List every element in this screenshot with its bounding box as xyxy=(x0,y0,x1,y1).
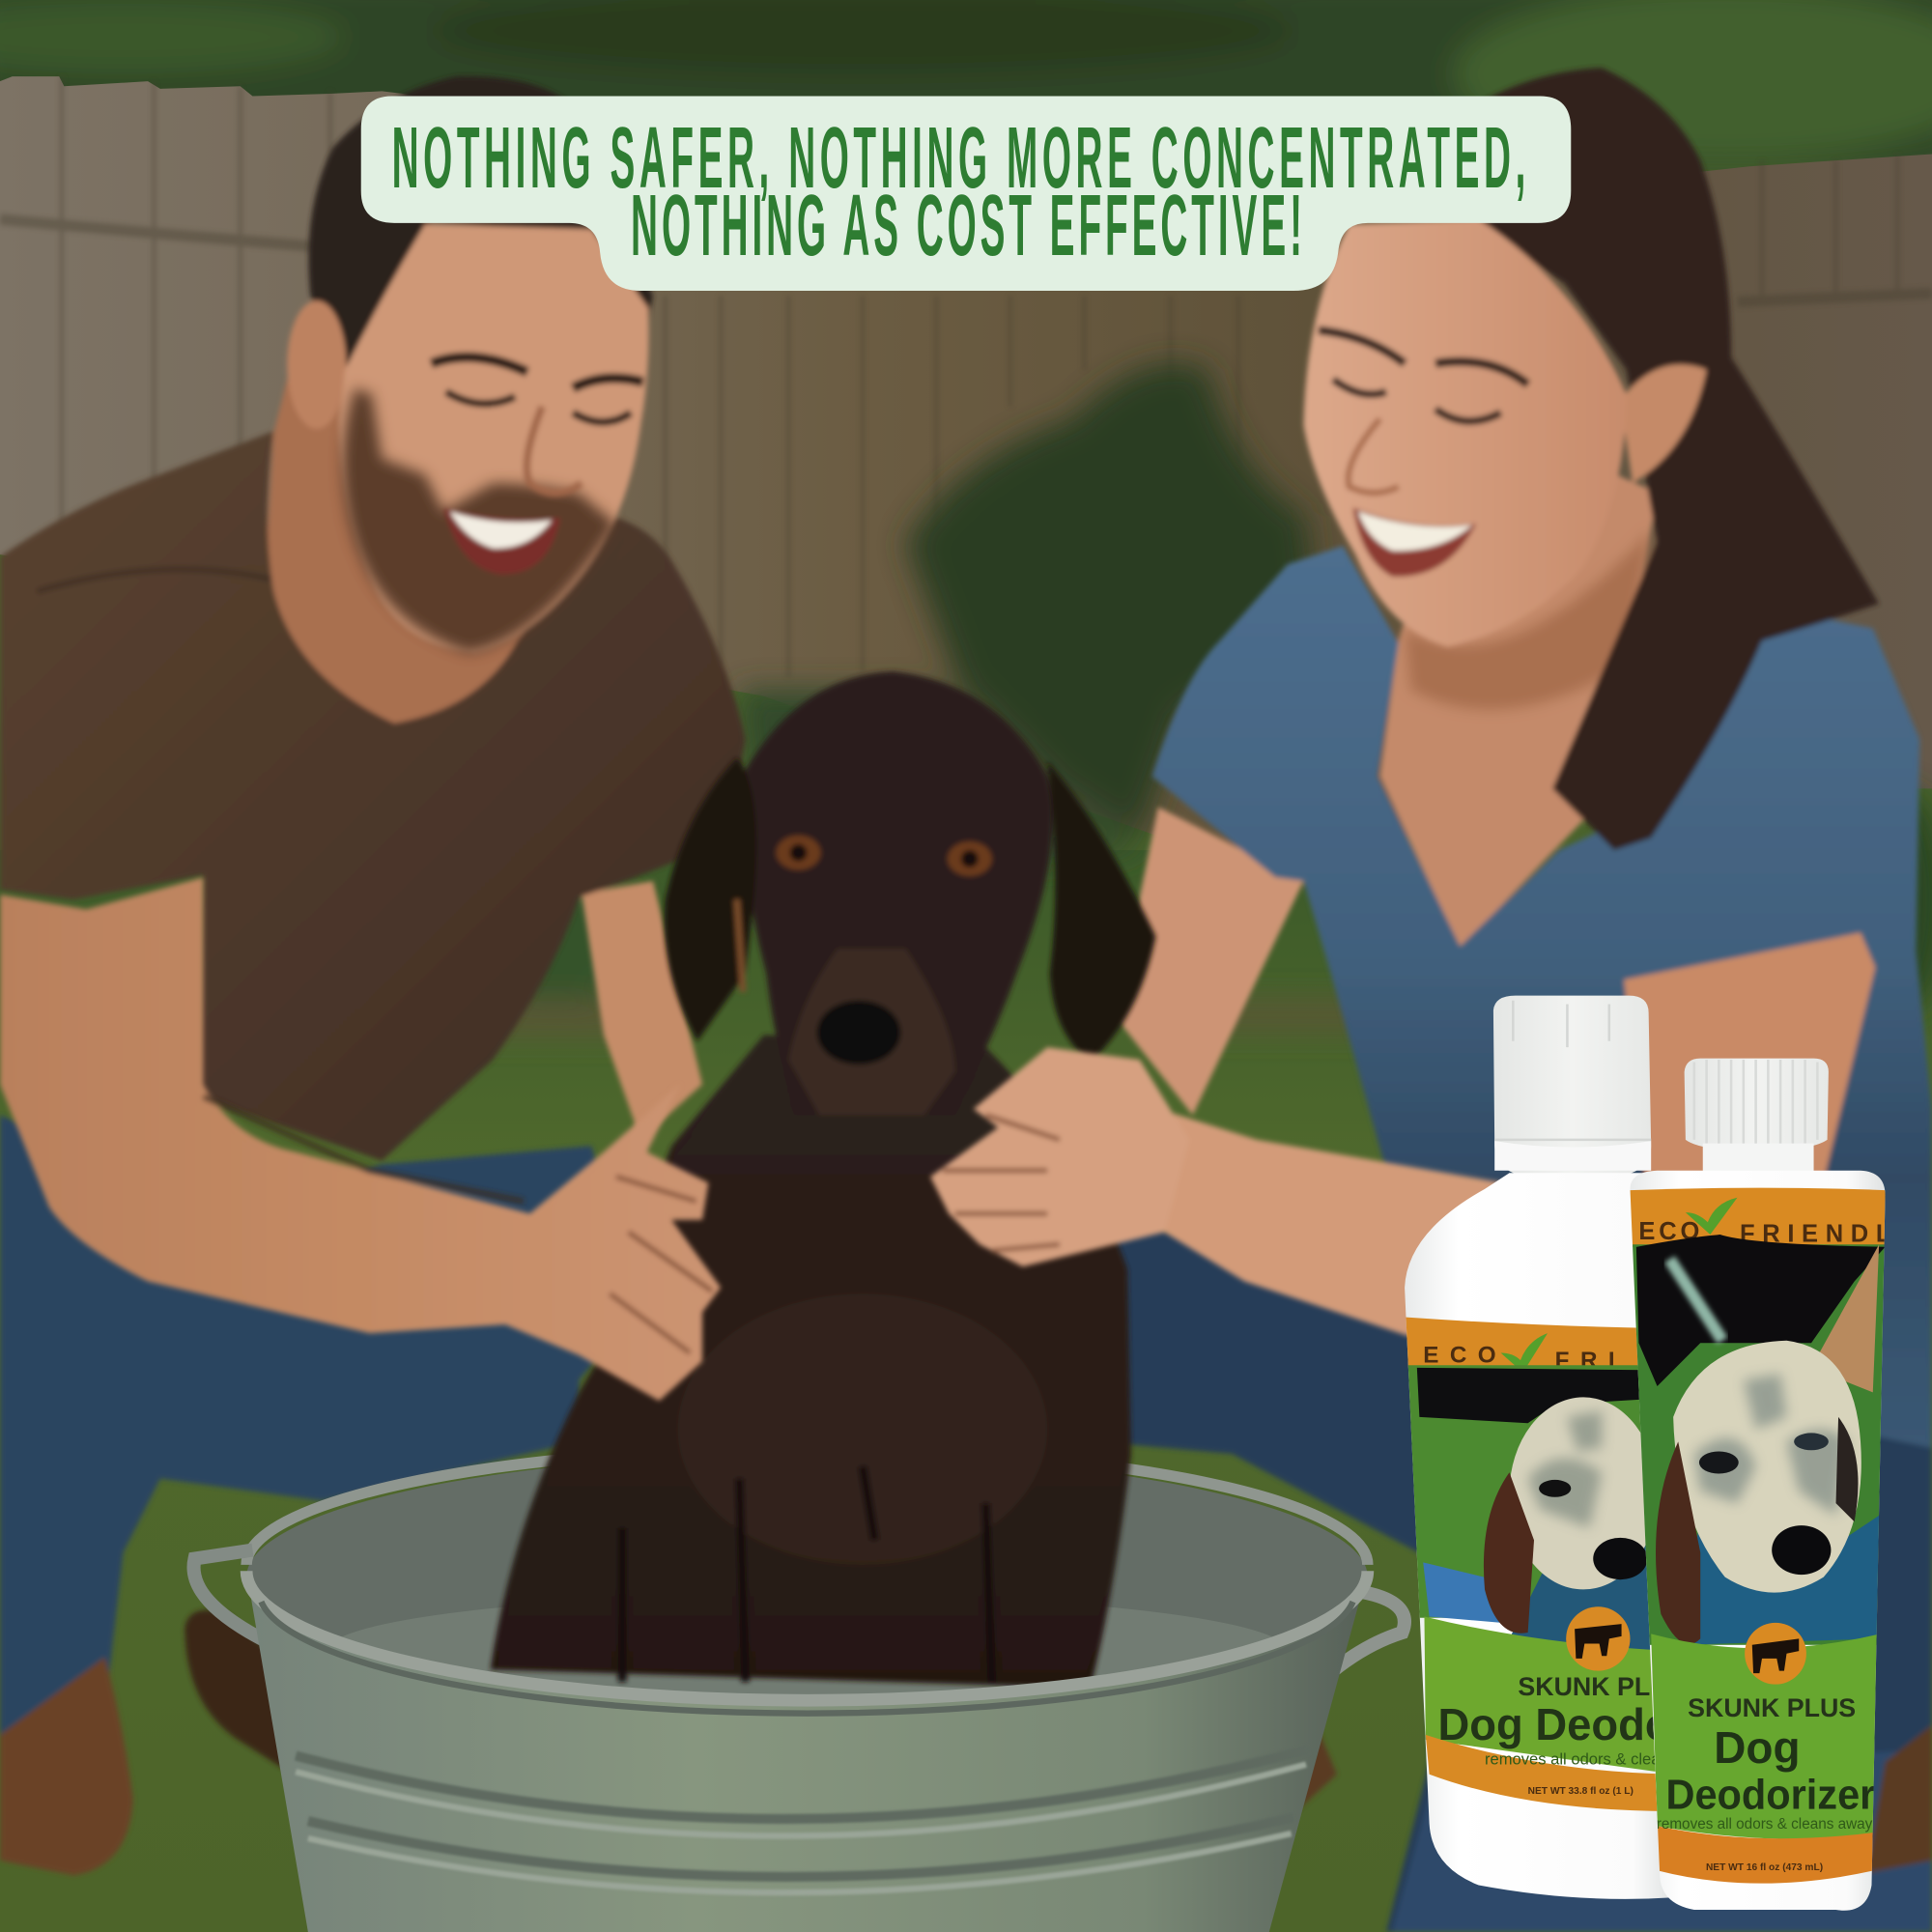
woman: jeans xyxy=(1096,1213,1932,1932)
woman: forearm and hand on dog xyxy=(930,1047,1503,1337)
man: smile xyxy=(443,508,560,574)
label: dog right ear xyxy=(1836,1417,1859,1521)
woman hand: shape xyxy=(930,1047,1189,1266)
label: badge xyxy=(1745,1623,1806,1685)
man: nose xyxy=(526,407,582,493)
label: badge dog xyxy=(1575,1624,1622,1659)
label: eco friendly text: ECO xyxy=(1423,1343,1507,1369)
label: tagline: removes all odors & cleans away xyxy=(1657,1816,1873,1833)
dog: leg shadows xyxy=(622,1466,992,1682)
dog: nose xyxy=(817,1001,900,1065)
label: product name: SKUNK PLUS xyxy=(1688,1693,1856,1722)
woman forearm: shape xyxy=(1140,1103,1503,1337)
label: dog eye xyxy=(1539,1480,1571,1497)
bottle large: body xyxy=(1405,1173,1673,1899)
label: photo dark xyxy=(1636,1235,1886,1386)
label: orange header xyxy=(1406,1318,1638,1368)
label: orange footer xyxy=(1658,1826,1886,1884)
product bottle: large xyxy=(1405,995,1669,1899)
woman: ear xyxy=(1620,364,1707,483)
dog: left ear xyxy=(665,757,756,1041)
banner: headline line 2: NOTHING AS COST EFFECTIVE! xyxy=(631,176,1302,274)
label: dog face shading xyxy=(1694,1374,1848,1516)
metal tub: inside xyxy=(246,1448,1368,1708)
label: product name: SKUNK PLUS xyxy=(1518,1672,1686,1701)
bottle large: cap band xyxy=(1494,1141,1651,1171)
label: leaf mark xyxy=(1686,1198,1737,1235)
dog: body xyxy=(491,1035,1131,1688)
woman: neck shadow xyxy=(1405,529,1651,710)
bottle small: cap xyxy=(1685,1059,1829,1151)
banner: headline line 1: NOTHING SAFER, NOTHING MORE CONCENTRATED, xyxy=(392,108,1525,206)
man: far boot xyxy=(185,1610,301,1780)
dog: chest highlights xyxy=(678,1293,1047,1565)
man: t-shirt xyxy=(0,431,746,1161)
man: arm and hand on dog xyxy=(0,877,721,1401)
product bottle: small xyxy=(1631,1059,1919,1911)
woman: teeth xyxy=(1358,511,1472,551)
man arm: hair edge xyxy=(203,1096,524,1202)
label: badge dog xyxy=(1752,1638,1799,1673)
label: dog eyes xyxy=(1699,1433,1829,1474)
man: face xyxy=(339,224,648,653)
label: product title: Dog Deodorizer xyxy=(1438,1699,1765,1749)
man: neck xyxy=(265,370,549,727)
metal tub: exterior xyxy=(194,1550,1405,1932)
man: jeans xyxy=(0,1115,640,1737)
label: photo grass xyxy=(1633,1244,1886,1645)
woman: ponytail and hair xyxy=(1466,68,1879,850)
label: dog nose xyxy=(1772,1525,1831,1575)
man: beard xyxy=(343,388,616,653)
label: net weight: NET WT 33.8 fl oz (1 L) xyxy=(1528,1786,1634,1797)
headline banner xyxy=(361,96,1571,291)
bottle small: label xyxy=(1631,1188,1919,1884)
woman: t-shirt xyxy=(1152,546,1932,1448)
bottle large: label xyxy=(1406,1318,1658,1811)
tub: ribs xyxy=(296,1749,1309,1877)
label: net weight: NET WT 16 fl oz (473 mL) xyxy=(1706,1862,1823,1873)
woman: nose xyxy=(1349,419,1399,493)
label: dog ear xyxy=(1484,1472,1534,1634)
tub: rim shadow xyxy=(261,1602,1353,1714)
label: product title line 2: Deodorizer xyxy=(1665,1772,1875,1818)
tub: body xyxy=(246,1571,1368,1932)
woman: smile xyxy=(1353,508,1476,577)
label: dog collar xyxy=(1682,1516,1879,1645)
man: eyes and brows xyxy=(431,357,643,388)
dog: muzzle xyxy=(788,949,955,1115)
woman: eyes and brows xyxy=(1319,330,1528,384)
man: ear xyxy=(287,300,346,429)
label: tagline: removes all odors & cleans xyxy=(1485,1750,1677,1769)
man: eyes xyxy=(446,392,631,422)
label: friendly text: FRI xyxy=(1555,1348,1626,1374)
label: photo grass xyxy=(1408,1365,1640,1618)
tub: left handle xyxy=(194,1550,273,1645)
bottle large: cap xyxy=(1493,996,1651,1178)
man: shirt sleeve shading xyxy=(37,569,271,591)
label: product title line 1: Dog xyxy=(1714,1722,1801,1773)
dog xyxy=(491,671,1155,1688)
tub: right handle xyxy=(1288,1592,1405,1716)
label: water splash xyxy=(1669,1260,1722,1341)
woman: right arm xyxy=(1624,933,1875,1233)
label: dog ear tan xyxy=(1811,1244,1879,1392)
woman: left arm xyxy=(1115,807,1303,1115)
woman: shoe xyxy=(1293,1700,1932,1873)
dog: eyes xyxy=(777,836,992,876)
label: dog nose xyxy=(1593,1538,1647,1579)
person: man (body) xyxy=(0,76,746,1875)
label: green panel xyxy=(1651,1633,1886,1839)
label: photo pool xyxy=(1423,1562,1499,1623)
man: teeth xyxy=(450,511,552,549)
person: woman (body) xyxy=(1096,68,1932,1932)
label: dog head xyxy=(1509,1397,1658,1589)
bottle small: cap ribs xyxy=(1694,1060,1817,1149)
woman: neck and chest xyxy=(1380,469,1658,949)
label: dog collar xyxy=(1511,1546,1650,1650)
label: green panel xyxy=(1424,1616,1676,1775)
label: friendly text: FRIENDLY xyxy=(1740,1221,1919,1248)
man: hair xyxy=(308,76,653,370)
label: leaf mark xyxy=(1501,1333,1548,1366)
man arm: shape xyxy=(0,877,721,1401)
woman hand: finger shadows xyxy=(943,1115,1060,1251)
woman: eyes xyxy=(1333,380,1501,421)
man: near boot xyxy=(0,1658,133,1875)
bottle small: body xyxy=(1631,1171,1886,1911)
bottle small: neck xyxy=(1703,1144,1814,1176)
label: dog ear xyxy=(1656,1441,1700,1644)
label: eco text: ECO xyxy=(1638,1218,1703,1245)
label: dog head xyxy=(1673,1341,1861,1593)
man: far arm xyxy=(582,881,702,1140)
man arm: finger shadows xyxy=(610,1177,712,1353)
woman: face xyxy=(1303,219,1627,647)
label: orange footer xyxy=(1426,1735,1676,1811)
label: orange header xyxy=(1631,1188,1886,1247)
dog: left ear fringe xyxy=(737,899,743,992)
label: photo dark xyxy=(1417,1368,1658,1423)
label: badge xyxy=(1566,1606,1631,1671)
dog: right ear xyxy=(1047,761,1155,1062)
woman: lower leg lighter xyxy=(1392,1749,1932,1932)
banner: shape xyxy=(361,96,1571,291)
bottle large: cap grooves xyxy=(1494,1001,1651,1140)
dog: head xyxy=(745,671,1052,1115)
tub: rim xyxy=(246,1571,1368,1700)
label: dog face shading xyxy=(1528,1410,1602,1528)
